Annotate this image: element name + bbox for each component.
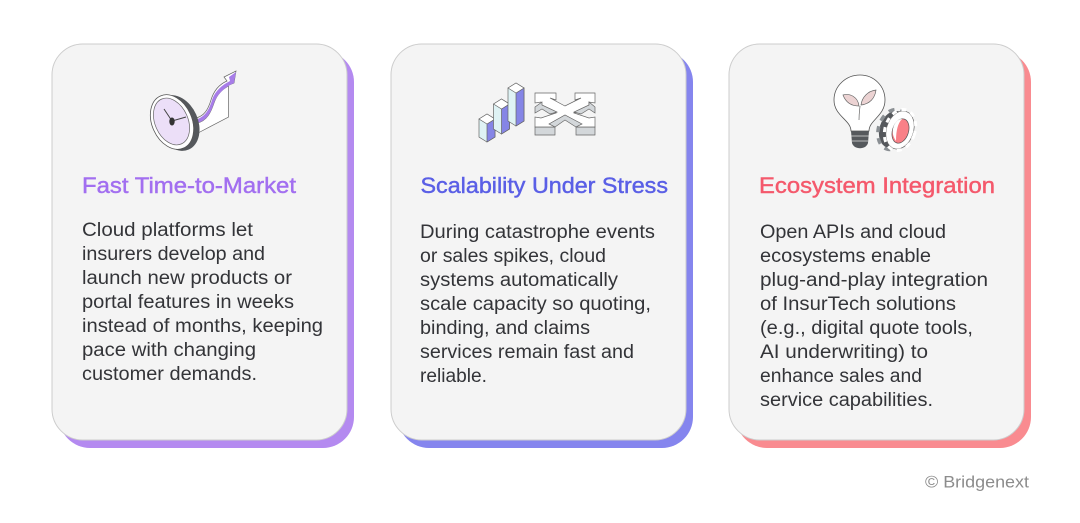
- heading: Scalability Under Stress: [420, 173, 668, 198]
- text block: [82, 220, 323, 385]
- text block: ecosystems enable: [760, 246, 931, 267]
- text block: service capabilities.: [760, 390, 933, 411]
- text block: launch new products or: [82, 268, 293, 289]
- panel: scalability under stress: [391, 44, 693, 448]
- heading: Fast Time-to-Market: [82, 173, 296, 198]
- text block: systems automatically: [420, 270, 619, 291]
- text block: or sales spikes, cloud: [420, 246, 606, 267]
- text block: insurers develop and: [82, 244, 265, 265]
- text block: [760, 222, 988, 411]
- card shadow purple: [59, 51, 354, 448]
- card body: [729, 44, 1024, 440]
- text block: Cloud platforms let: [82, 220, 254, 241]
- text block: Open APIs and cloud: [760, 222, 946, 243]
- text block: [420, 222, 655, 387]
- copyright footer: © Bridgenext: [925, 472, 1029, 492]
- text block: During catastrophe events: [420, 222, 655, 243]
- icon: bars and crossing arrows: [479, 83, 595, 142]
- text block: services remain fast and: [420, 342, 634, 363]
- panel: fast time-to-market: [52, 44, 354, 448]
- panel: ecosystem integration: [729, 44, 1031, 448]
- card shadow coral: [736, 51, 1031, 448]
- card body: [391, 44, 686, 440]
- text block: customer demands.: [82, 364, 257, 385]
- text block: scale capacity so quoting,: [420, 294, 651, 315]
- text block: pace with changing: [82, 340, 256, 361]
- card shadow blue: [398, 51, 693, 448]
- text block: enhance sales and: [760, 366, 922, 387]
- heading: Ecosystem Integration: [759, 173, 995, 198]
- text block: reliable.: [420, 366, 487, 387]
- icon: light bulb with plant and gear: [834, 75, 921, 155]
- text block: portal features in weeks: [82, 292, 294, 313]
- text block: instead of months, keeping: [82, 316, 323, 337]
- text block: (e.g., digital quote tools,: [760, 318, 973, 339]
- text block: of InsurTech solutions: [760, 294, 956, 315]
- text block: AI underwriting) to: [760, 342, 928, 363]
- text block: binding, and claims: [420, 318, 590, 339]
- text block: plug-and-play integration: [760, 270, 988, 291]
- card body: [52, 44, 347, 440]
- icon: clock with rising arrow: [142, 71, 236, 158]
